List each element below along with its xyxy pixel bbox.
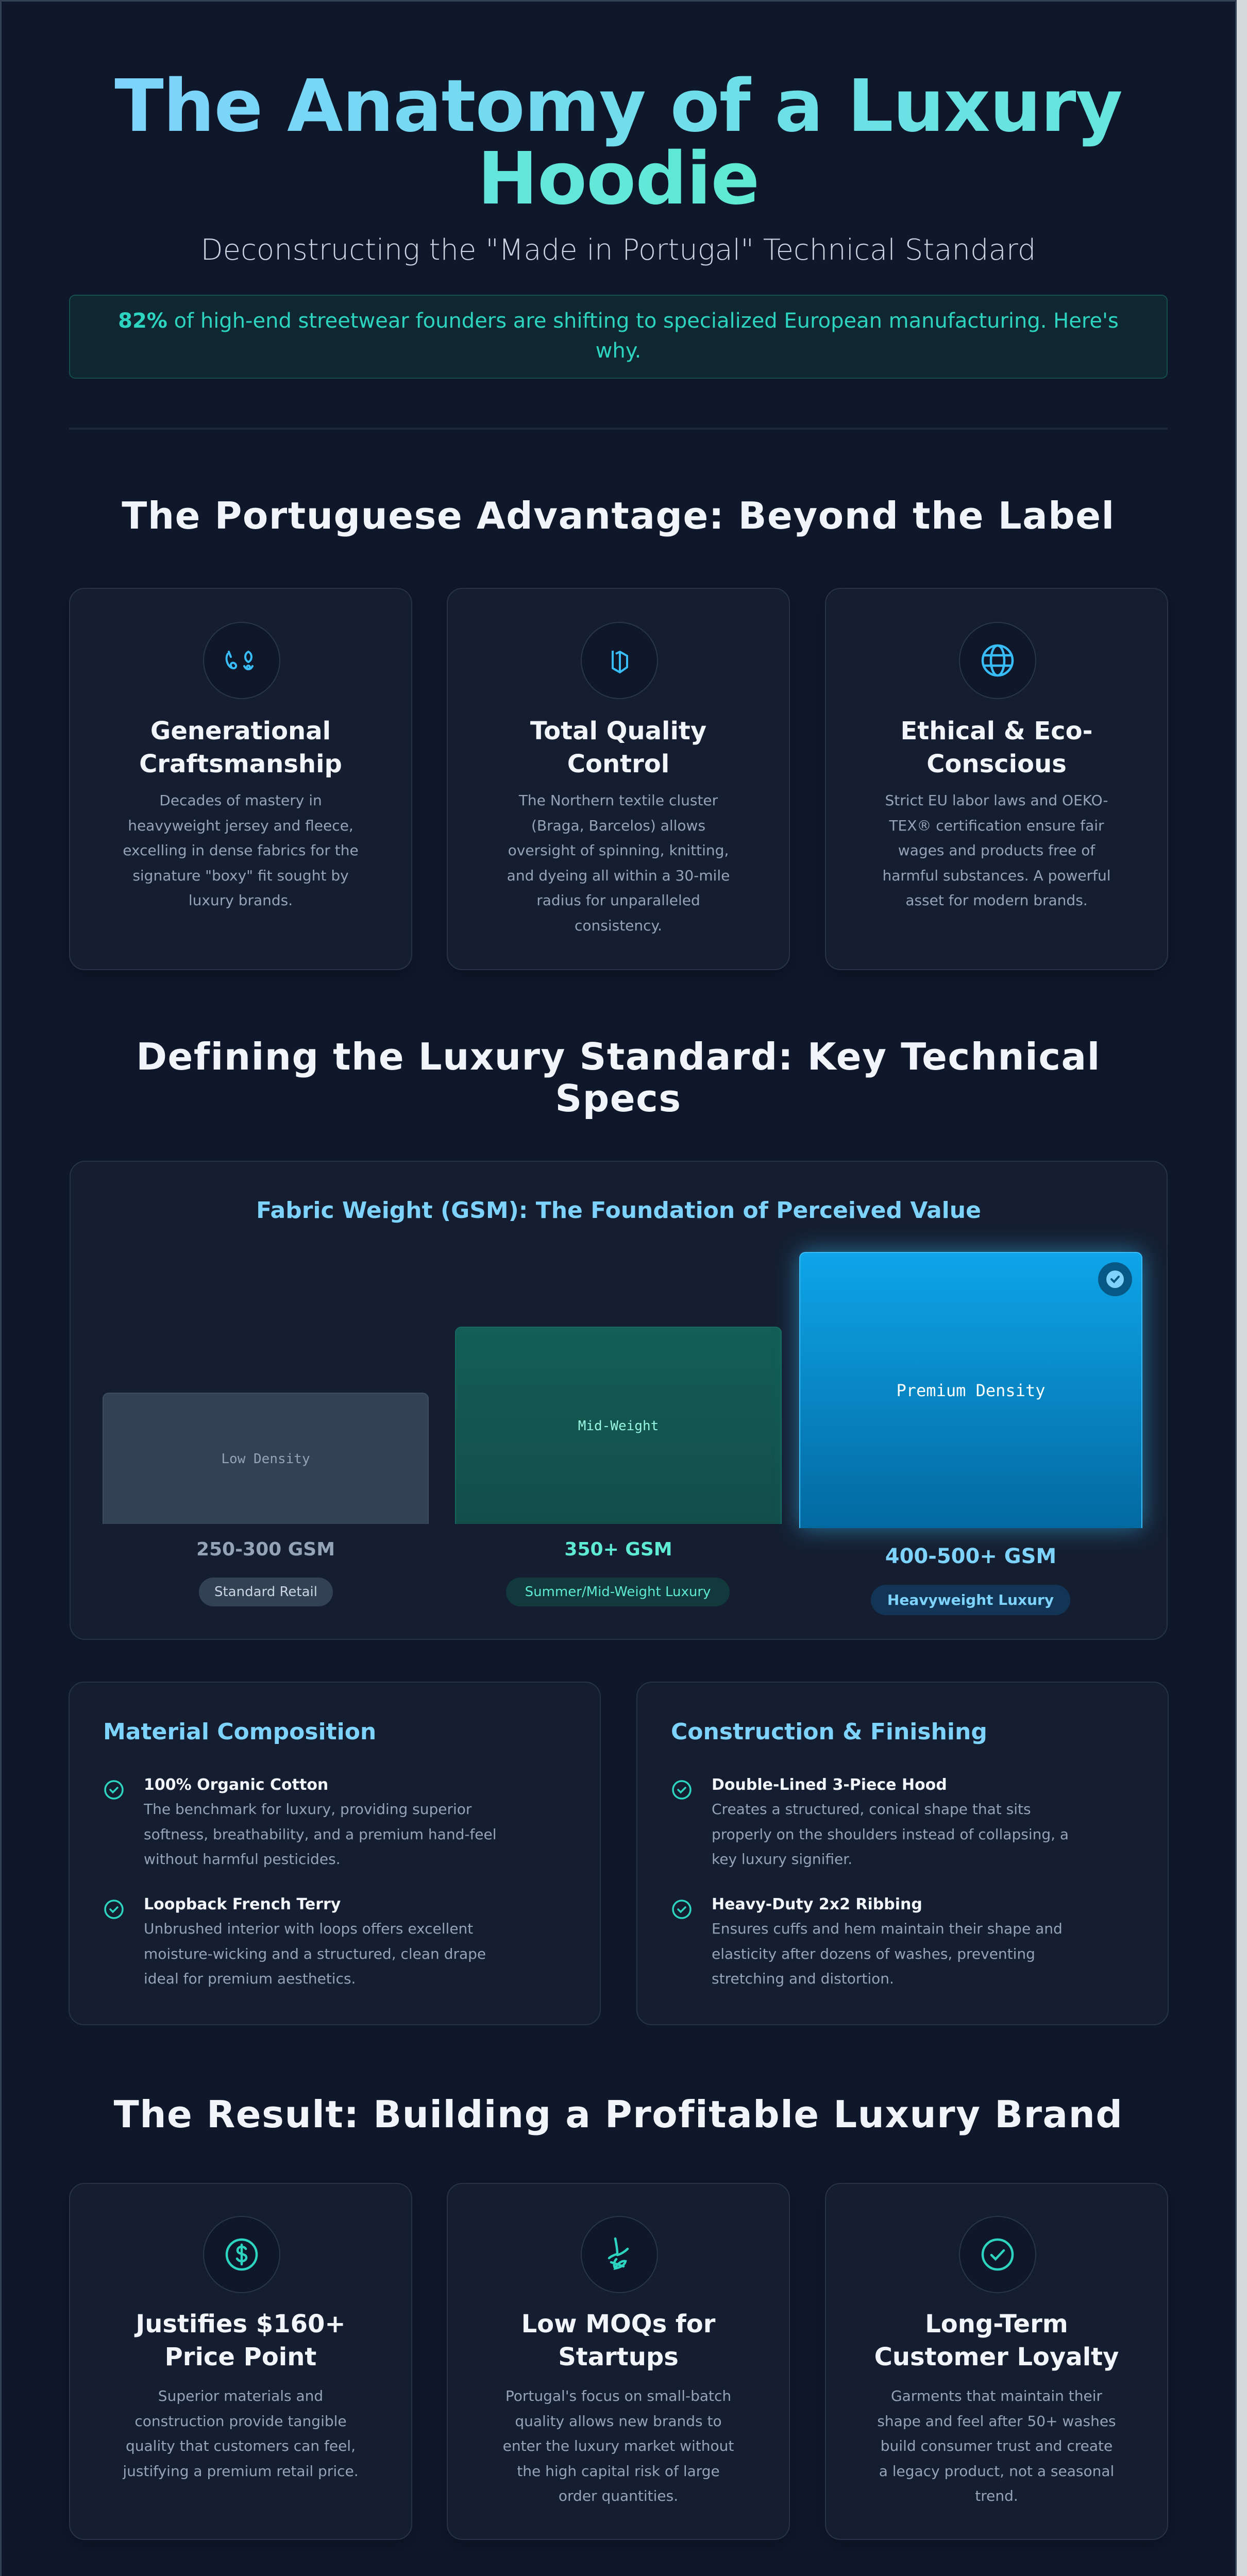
card: Total Quality Control: radius for unparalleled (536, 892, 700, 909)
panel: fabric weight chart (70, 1161, 1168, 1640)
card: customer loyalty: Garments that maintain their (891, 2387, 1102, 2404)
card: price point: Justifies $160+ (136, 2310, 346, 2338)
panel: construction & finishing: properly on the shoulders instead of collapsing, a (712, 1826, 1069, 1842)
card: Generational Craftsmanship: heavyweight jersey and fleece, (128, 817, 353, 834)
bar: premium density (799, 1252, 1142, 1528)
card: price point: Price Point (165, 2343, 316, 2371)
panel: construction & finishing: Ensures cuffs and hem maintain their shape and (712, 1920, 1063, 1937)
pill: standard retail: Standard Retail (214, 1584, 317, 1600)
panel: material composition: Loopback French Terry (144, 1895, 341, 1913)
subtitle: Deconstructing the "Made in Portugal" Technical Standard (201, 233, 1036, 267)
panel: material composition: The benchmark for luxury, providing superior (144, 1801, 471, 1818)
panel: construction & finishing: Double-Lined 3-Piece Hood (712, 1776, 947, 1794)
card: customer loyalty: build consumer trust and create (881, 2437, 1113, 2454)
callout: stat: why. (596, 339, 641, 363)
panel: material composition: softness, breathability, and a premium hand-feel (144, 1826, 497, 1842)
callout: stat (69, 295, 1168, 379)
callout: stat: 82% of high-end streetwear founders are shifting to specialized European manufacturing. Here's (118, 309, 1119, 333)
card: low MOQs (447, 2183, 790, 2540)
bar: low density (103, 1393, 429, 1524)
panel: material composition: Material Composition (103, 1719, 376, 1745)
card: price point: quality that customers can feel, (126, 2437, 356, 2454)
item: french terry (104, 1895, 486, 1987)
card: customer loyalty: shape and feel after 50+ washes (877, 2412, 1116, 2430)
heading: the result: The Result: Building a Profitable Luxury Brand (114, 2093, 1123, 2136)
icon: dollar (203, 2216, 280, 2293)
card: customer loyalty: Customer Loyalty (874, 2343, 1119, 2371)
panel: construction & finishing: Construction & Finishing (671, 1719, 987, 1745)
card: Total Quality Control: oversight of spinning, knitting, (508, 842, 729, 859)
card: price point: Superior materials and (158, 2387, 323, 2404)
panel: material composition: without harmful pesticides. (144, 1851, 341, 1868)
heading: technical specs (136, 1035, 1101, 1120)
panel: material composition: ideal for premium aesthetics. (144, 1970, 356, 1987)
card: Ethical & Eco-Conscious: TEX® certification ensure fair (889, 817, 1104, 834)
panel: construction & finishing: stretching and distortion. (712, 1970, 894, 1987)
title: Hoodie (478, 137, 759, 221)
card: low MOQs: the high capital risk of large (517, 2463, 720, 2479)
card: Generational Craftsmanship (69, 588, 412, 970)
pill: mid-weight luxury (506, 1578, 730, 1606)
card: low MOQs: order quantities. (559, 2487, 678, 2504)
card: Total Quality Control: The Northern textile cluster (519, 792, 718, 809)
label: 250-300: 250-300 GSM (196, 1539, 335, 1560)
heading: technical specs: Defining the Luxury Standard: Key Technical (136, 1035, 1101, 1078)
panel: material composition: Unbrushed interior with loops offers excellent (144, 1920, 473, 1937)
card: low MOQs: Low MOQs for (521, 2310, 715, 2338)
icon: globe (959, 622, 1036, 699)
panel: construction & finishing: key luxury signifier. (712, 1851, 852, 1868)
card: Total Quality Control (447, 588, 790, 970)
icon: check circle (959, 2216, 1036, 2293)
chart title: Fabric Weight (GSM): The Foundation of Perceived Value (256, 1197, 981, 1224)
icon: craftsmanship (203, 622, 280, 699)
pill: standard retail (199, 1578, 333, 1606)
card: Generational Craftsmanship: Decades of mastery in (159, 792, 322, 809)
item: ribbing (672, 1895, 1063, 1987)
card: low MOQs: Startups (558, 2343, 679, 2371)
panel: material composition: moisture-wicking and a structured, clean drape (144, 1945, 486, 1962)
panel: construction & finishing: Heavy-Duty 2x2 Ribbing (712, 1895, 922, 1913)
card: Generational Craftsmanship: excelling in dense fabrics for the (123, 842, 359, 859)
card: Ethical & Eco-Conscious: Ethical & Eco- (900, 717, 1093, 745)
card: Ethical & Eco-Conscious: harmful substances. A powerful (882, 867, 1111, 884)
card: price point: construction provide tangible (134, 2412, 347, 2430)
pill: heavyweight luxury (871, 1585, 1070, 1615)
card: Total Quality Control: Control (567, 750, 669, 778)
card: Ethical & Eco-Conscious: wages and products free of (898, 842, 1095, 859)
card: Ethical & Eco-Conscious: Strict EU labor laws and OEKO- (885, 792, 1108, 809)
bar: mid-weight (455, 1327, 782, 1524)
panel: construction & finishing: Creates a structured, conical shape that sits (712, 1801, 1031, 1818)
card: Total Quality Control: (Braga, Barcelos) allows (531, 817, 705, 834)
item: hood (672, 1776, 1069, 1868)
panel: material composition (69, 1682, 601, 2025)
card: Generational Craftsmanship: luxury brands. (189, 892, 293, 909)
label: 400-500+: 400-500+ GSM (885, 1545, 1056, 1568)
bar: premium density: Premium Density (897, 1381, 1045, 1400)
label: 350+: 350+ GSM (564, 1539, 672, 1560)
card: Generational Craftsmanship: Craftsmanship (139, 750, 342, 778)
card: price point (69, 2183, 412, 2540)
panel: construction & finishing: elasticity after dozens of washes, preventing (712, 1945, 1035, 1962)
bar: mid-weight: Mid-Weight (578, 1418, 659, 1433)
card: Total Quality Control: and dyeing all within a 30-mile (507, 867, 730, 884)
panel: construction & finishing (636, 1682, 1169, 2025)
card: Total Quality Control: Total Quality (530, 717, 706, 745)
bar: low density: Low Density (221, 1451, 310, 1466)
card: customer loyalty: trend. (975, 2487, 1018, 2504)
pill: mid-weight luxury: Summer/Mid-Weight Luxury (525, 1584, 711, 1600)
card: Ethical & Eco-Conscious: asset for modern brands. (905, 892, 1088, 909)
card: Generational Craftsmanship: signature "boxy" fit sought by (132, 867, 349, 884)
icon: sprout (581, 2216, 658, 2293)
card: customer loyalty: a legacy product, not a seasonal (879, 2463, 1114, 2479)
heading: Portuguese advantage: The Portuguese Advantage: Beyond the Label (122, 494, 1115, 537)
card: low MOQs: Portugal's focus on small-batch (505, 2387, 731, 2404)
icon: check badge (1098, 1262, 1132, 1296)
card: Total Quality Control: consistency. (575, 917, 662, 934)
card: customer loyalty: Long-Term (925, 2310, 1068, 2338)
card: Ethical & Eco-Conscious (825, 588, 1168, 970)
title: The Anatomy of a Luxury (114, 64, 1122, 148)
card: Ethical & Eco-Conscious: Conscious (926, 750, 1067, 778)
card: low MOQs: enter the luxury market without (503, 2437, 734, 2454)
card: customer loyalty (825, 2183, 1168, 2540)
pill: heavyweight luxury: Heavyweight Luxury (887, 1591, 1054, 1608)
card: low MOQs: quality allows new brands to (515, 2412, 722, 2430)
card: Generational Craftsmanship: Generational (150, 717, 331, 745)
heading: technical specs: Specs (555, 1077, 682, 1120)
card: price point: justifying a premium retail price. (123, 2463, 359, 2479)
item: organic cotton (104, 1776, 497, 1868)
title (114, 64, 1122, 221)
panel: material composition: 100% Organic Cotton (144, 1776, 328, 1794)
icon: quality cube (581, 622, 658, 699)
